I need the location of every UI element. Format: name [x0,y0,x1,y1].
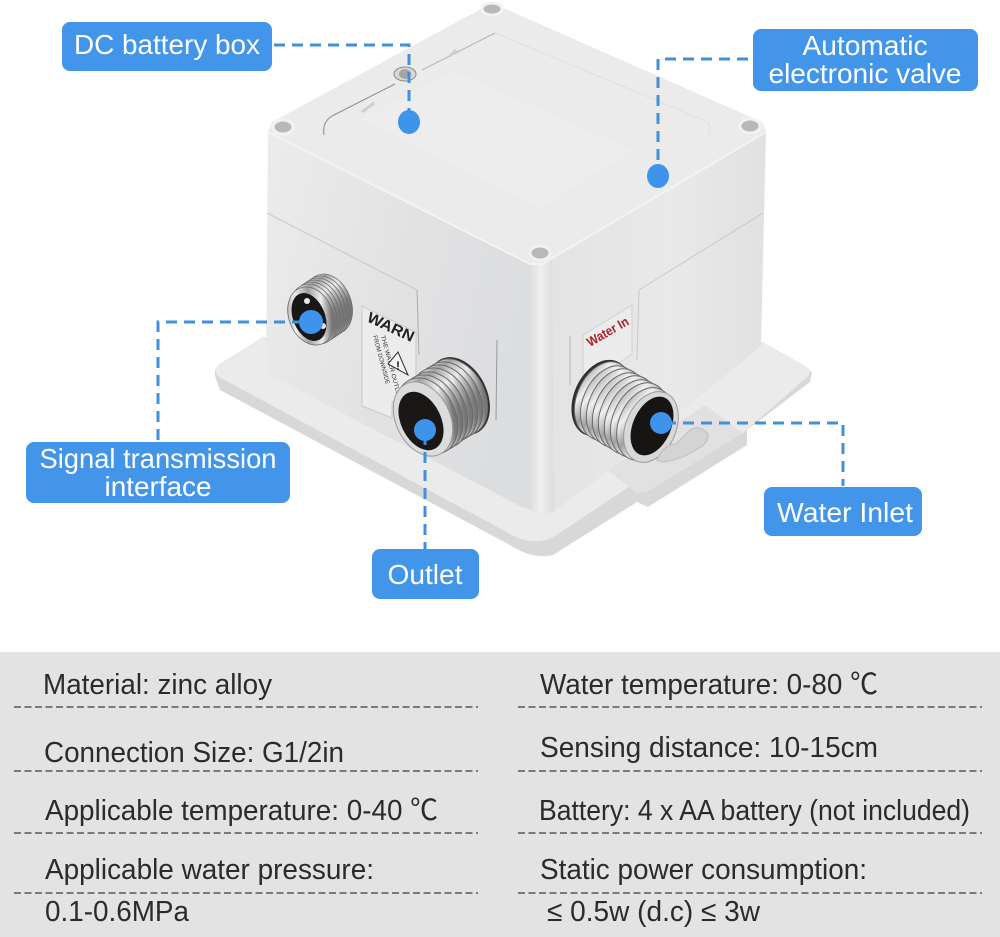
callout: Outlet [372,419,479,599]
outlet fitting [382,347,502,466]
dashed row dividers [14,707,982,893]
callout: Automatic electronic valve [647,29,978,188]
product: valve box [215,3,812,556]
water in label: Water In [584,314,631,350]
warn label: THE WATER OUTLETS [379,335,403,404]
callout: Automatic electronic valve: electronic valve [768,58,962,89]
right spec column [539,669,970,928]
left spec column: Connection Size: G1/2in [44,737,344,769]
corner holes [273,3,760,260]
callout: Water Inlet: Water Inlet [777,497,913,528]
right spec column: Battery: 4 x AA battery (not included) [539,795,970,827]
left spec column [43,669,438,928]
callout: Signal transmission interface [26,310,323,503]
warn label [362,306,417,418]
box front corner [528,258,554,513]
mounting slot [657,428,708,462]
signal connector [279,267,361,352]
panel: specifications [0,652,1000,937]
left spec column: Material: zinc alloy [43,669,272,701]
warn label: FROM DOWNSIDE [371,335,390,385]
inlet fitting [560,350,689,471]
right spec column: Sensing distance: 10-15cm [540,732,878,764]
left spec column: 0.1-0.6MPa [45,896,190,928]
warn label: WARN [364,309,417,346]
callout: Signal transmission interface: interface [104,471,212,502]
callout: DC battery box: DC battery box [74,29,260,60]
left spec column: Applicable water pressure: [45,854,374,886]
box left face [266,130,540,512]
water in label [583,305,632,388]
callout: Signal transmission interface: Signal transmission [40,443,276,474]
inner lid panel [360,72,632,208]
warn label: ! [396,359,400,373]
callout: Water Inlet [650,412,922,536]
top rim shading [268,132,766,264]
mounting base plate [215,337,812,556]
right spec column: Water temperature: 0-80 ℃ [540,669,878,701]
callout: DC battery box [62,22,420,134]
box right face [536,130,766,513]
left spec column: Applicable temperature: 0-40 ℃ [45,795,438,827]
right spec column: ≤ 0.5w (d.c) ≤ 3w [547,896,761,928]
battery box lid outline [324,33,710,135]
box top face [268,3,766,264]
housing seams [267,213,763,420]
callout: Automatic electronic valve: Automatic [802,30,928,61]
right spec column: Static power consumption: [540,854,867,886]
screw [394,67,416,81]
callout: Outlet: Outlet [388,559,463,590]
